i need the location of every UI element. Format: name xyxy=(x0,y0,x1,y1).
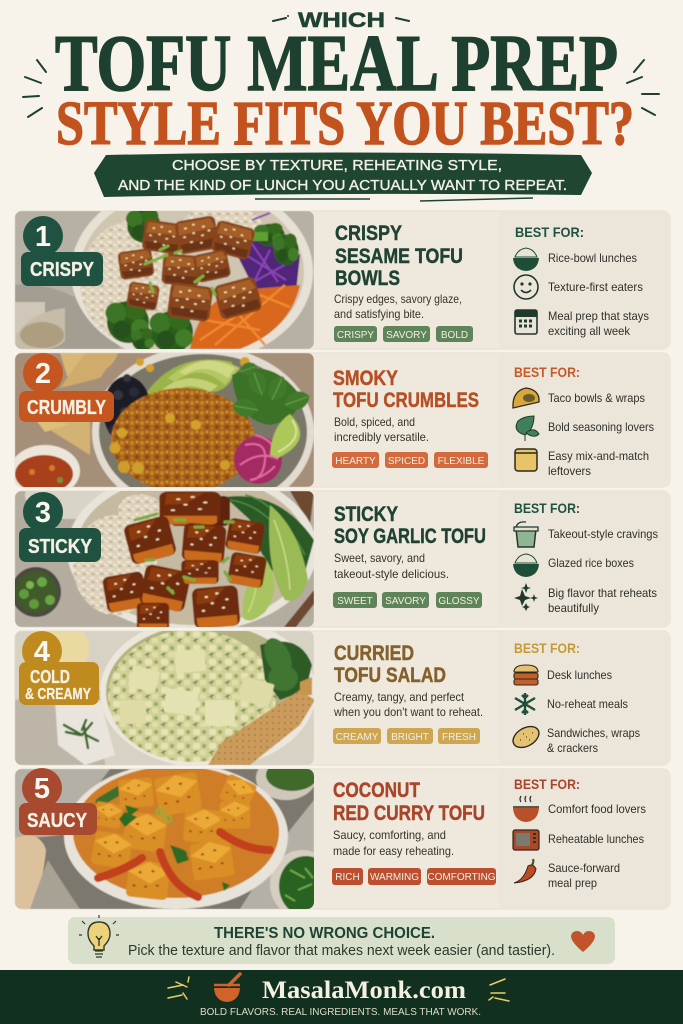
badge: 4 cold and creamy xyxy=(19,631,99,705)
best for list: meal prep xyxy=(548,876,597,890)
description: Saucy, comforting, and xyxy=(333,828,446,842)
heading: crispy sesame tofu bowls xyxy=(335,222,463,290)
icon: mortar and pestle xyxy=(214,974,240,1002)
heading: crispy sesame tofu bowls: SESAME TOFU xyxy=(335,245,463,268)
badge: 2 crumbly xyxy=(19,353,114,422)
description xyxy=(334,292,462,321)
tags: SAVORY xyxy=(385,596,426,607)
description: Crispy edges, savory glaze, xyxy=(334,292,462,306)
icon: taco xyxy=(513,388,539,408)
callout heading: THERE'S NO WRONG CHOICE. xyxy=(214,925,435,942)
best for list: Glazed rice boxes xyxy=(548,556,634,570)
photo: sticky tofu bowl xyxy=(15,491,314,627)
heading: crispy sesame tofu bowls: CRISPY xyxy=(335,222,402,245)
description: made for easy reheating. xyxy=(333,844,454,858)
best for list: exciting all week xyxy=(548,324,631,338)
heading: smoky tofu crumbles xyxy=(333,367,479,412)
badge: 2 crumbly: 2 xyxy=(35,358,51,390)
heading: smoky tofu crumbles: TOFU CRUMBLES xyxy=(333,389,479,412)
panel: coconut red curry tofu xyxy=(14,768,670,910)
badge: 4 cold and creamy: & CREAMY xyxy=(25,686,91,703)
tags xyxy=(332,452,488,468)
photo: red curry tofu bowl xyxy=(15,769,314,909)
badge: 3 sticky: 3 xyxy=(35,497,51,529)
icon: smiling face xyxy=(514,275,538,299)
best for list: Meal prep that stays xyxy=(548,309,649,323)
badge: 1 crispy xyxy=(21,216,103,286)
heading: coconut red curry tofu: COCONUT xyxy=(333,779,420,802)
tags: CRISPY xyxy=(337,330,374,341)
tags: SWEET xyxy=(337,596,373,607)
heading: curried tofu salad xyxy=(334,642,446,687)
description: Sweet, savory, and xyxy=(334,551,425,565)
icon: basil leaves xyxy=(516,416,539,441)
best for list: BEST FOR: xyxy=(515,224,584,240)
badge: 3 sticky xyxy=(19,492,101,562)
heading: sticky soy garlic tofu: SOY GARLIC TOFU xyxy=(334,525,486,548)
subtitle ribbon xyxy=(94,152,592,197)
badge: 3 sticky: STICKY xyxy=(28,536,93,558)
tags: SAVORY xyxy=(386,330,427,341)
panel: curried tofu salad xyxy=(14,630,670,766)
best for list: Taco bowls & wraps xyxy=(548,391,645,405)
best for list: Bold seasoning lovers xyxy=(548,420,654,434)
best for list: Big flavor that reheats xyxy=(548,586,657,600)
best for list: Desk lunches xyxy=(547,668,612,682)
icon: sparkles xyxy=(514,583,538,611)
icon: takeout box xyxy=(514,522,538,547)
best for list: Easy mix-and-match xyxy=(548,449,649,463)
panel: sticky soy garlic tofu xyxy=(14,490,670,628)
subtitle line 2: AND THE KIND OF LUNCH YOU ACTUALLY WANT TO REPEAT. xyxy=(118,177,567,194)
best for list: Sandwiches, wraps xyxy=(547,726,640,740)
icon: cracker xyxy=(509,722,543,752)
best for list: Sauce-forward xyxy=(548,861,620,875)
badge: 1 crispy: 1 xyxy=(35,221,51,253)
panel: crispy sesame tofu bowls xyxy=(14,210,670,350)
icon: heart xyxy=(571,931,595,952)
badge: 4 cold and creamy: 4 xyxy=(34,636,50,668)
best for list xyxy=(513,224,649,338)
best for list: beautifully xyxy=(548,601,599,615)
site name: MasalaMonk.com xyxy=(262,977,466,1004)
icon: container xyxy=(515,449,537,471)
icon: calendar xyxy=(515,310,537,334)
icon: microwave xyxy=(513,830,539,850)
best for list: BEST FOR: xyxy=(514,640,580,656)
subtitle line 1: CHOOSE BY TEXTURE, REHEATING STYLE, xyxy=(172,157,502,174)
icon: light bulb xyxy=(79,915,119,957)
tags: BOLD xyxy=(441,330,468,341)
best for list xyxy=(513,500,658,615)
tags: FLEXIBLE xyxy=(438,456,485,467)
panel: smoky tofu crumbles xyxy=(14,352,670,488)
best for list: BEST FOR: xyxy=(514,500,580,516)
badge: 2 crumbly: CRUMBLY xyxy=(27,397,107,419)
description: Bold, spiced, and xyxy=(334,415,415,429)
heading: sticky soy garlic tofu xyxy=(334,503,486,548)
footer xyxy=(0,970,683,1024)
best for list: BEST FOR: xyxy=(514,776,580,792)
heading: coconut red curry tofu: RED CURRY TOFU xyxy=(333,802,485,825)
best for list xyxy=(513,364,654,478)
tags xyxy=(334,326,473,342)
tags: CREAMY xyxy=(336,732,379,743)
description xyxy=(333,828,454,858)
tags xyxy=(333,728,480,744)
best for list: Rice-bowl lunches xyxy=(548,251,637,265)
best for list: leftovers xyxy=(548,464,591,478)
best for list: Texture-first eaters xyxy=(548,280,643,294)
badge: 4 cold and creamy: COLD xyxy=(30,667,70,687)
best for list: No-reheat meals xyxy=(547,697,628,711)
description xyxy=(334,551,449,581)
heading: sticky soy garlic tofu: STICKY xyxy=(334,503,398,526)
best for list xyxy=(509,640,640,755)
tags: SPICED xyxy=(388,456,425,467)
best for list: & crackers xyxy=(547,741,598,755)
badge: 1 crispy: CRISPY xyxy=(30,259,95,281)
tags xyxy=(333,592,482,608)
tags: WARMING xyxy=(370,872,419,883)
heading: crispy sesame tofu bowls: BOWLS xyxy=(335,267,400,290)
tags xyxy=(332,868,496,885)
description: when you don't want to reheat. xyxy=(333,705,483,719)
badge: 5 saucy xyxy=(19,768,97,835)
description xyxy=(334,415,429,444)
tags: BRIGHT xyxy=(391,732,429,743)
tags: HEARTY xyxy=(335,456,376,467)
best for list: Takeout-style cravings xyxy=(548,527,658,541)
heading: smoky tofu crumbles: SMOKY xyxy=(333,367,398,390)
heading: coconut red curry tofu xyxy=(333,779,485,825)
heading: curried tofu salad: CURRIED xyxy=(334,642,414,665)
icon: snowflake xyxy=(515,693,535,715)
best for list: Comfort food lovers xyxy=(548,802,646,816)
best for list xyxy=(513,776,646,890)
tags: COMFORTING xyxy=(427,872,496,883)
icon: rice bowl xyxy=(513,248,539,271)
photo: sesame tofu bowl xyxy=(15,211,314,349)
description: and satisfying bite. xyxy=(334,307,424,321)
title: which: WHICH xyxy=(298,9,385,32)
icon: chili pepper xyxy=(514,859,536,883)
best for list: Reheatable lunches xyxy=(548,832,644,846)
tags: FRESH xyxy=(442,732,476,743)
description: takeout-style delicious. xyxy=(334,567,449,581)
icon: rice box bowl xyxy=(513,554,539,577)
badge: 5 saucy: SAUCY xyxy=(27,810,88,832)
best for list: BEST FOR: xyxy=(514,364,580,380)
description: Creamy, tangy, and perfect xyxy=(334,690,465,704)
title block xyxy=(55,9,634,158)
heading: curried tofu salad: TOFU SALAD xyxy=(334,664,446,687)
tags: GLOSSY xyxy=(438,596,480,607)
photo: tofu crumbles bowl xyxy=(15,353,314,487)
tagline: BOLD FLAVORS. REAL INGREDIENTS. MEALS THAT WORK. xyxy=(200,1006,481,1018)
description xyxy=(333,690,483,719)
tags: RICH xyxy=(335,872,360,883)
photo: curried tofu salad bowl xyxy=(15,631,314,765)
callout text: Pick the texture and flavor that makes next week easier (and tastier). xyxy=(128,943,555,959)
icon: sandwich xyxy=(514,665,538,685)
icon: steaming bowl xyxy=(513,796,539,822)
badge: 5 saucy: 5 xyxy=(34,773,50,805)
description: incredibly versatile. xyxy=(334,430,429,444)
callout banner xyxy=(68,915,615,964)
